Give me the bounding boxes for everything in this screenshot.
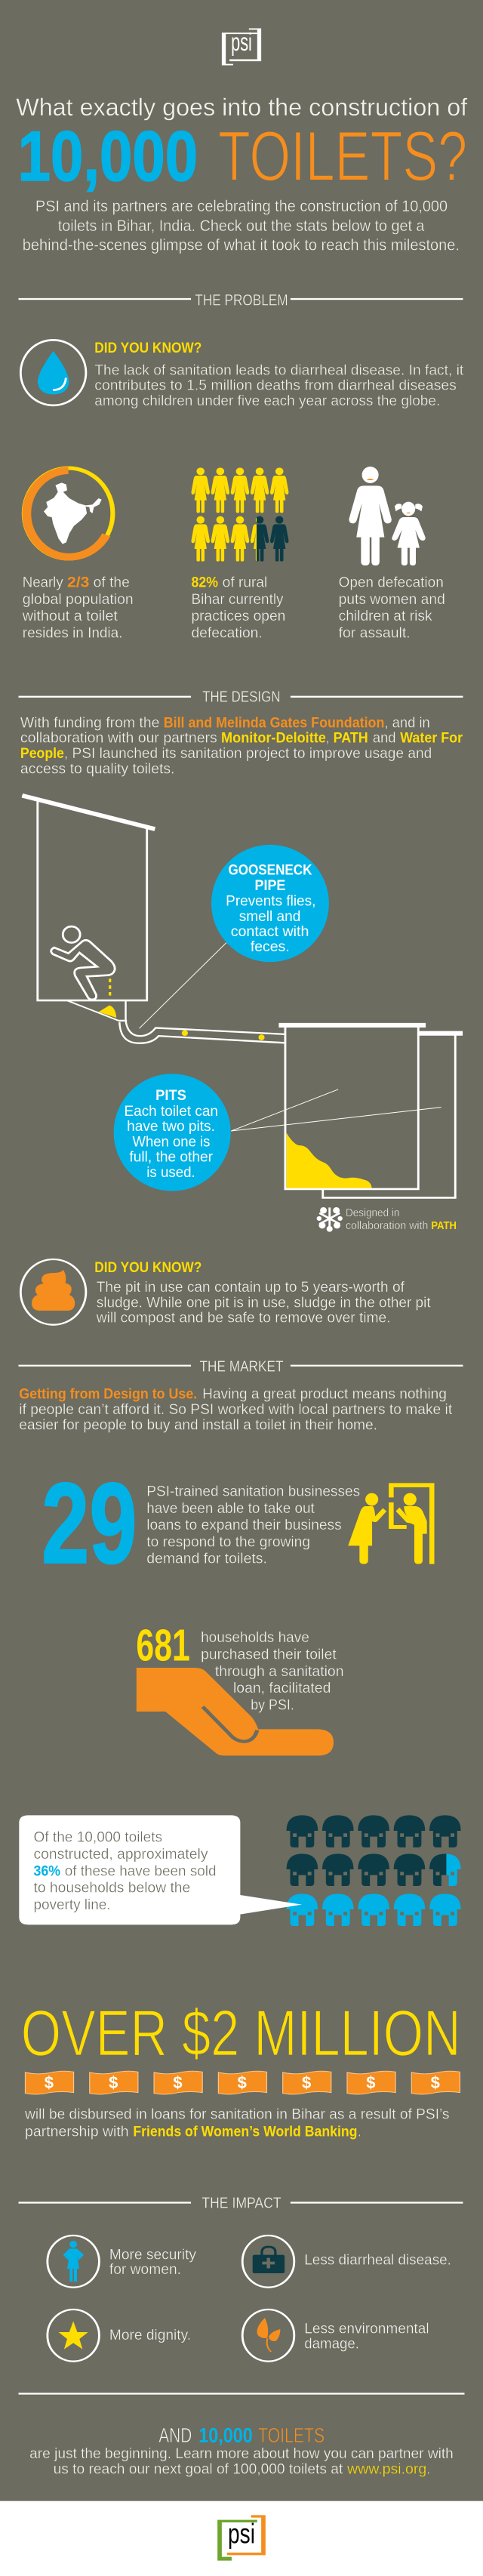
designed with PATH text: PATH (431, 1220, 457, 1232)
callout: gooseneck pipe: Prevents flies, (226, 893, 315, 909)
stat text: 82% (191, 575, 285, 641)
design paragraph: , (326, 731, 329, 746)
heading: the problem: THE PROBLEM (195, 291, 288, 309)
households text: loan, facilitated (233, 1681, 331, 1696)
businesses text: PSI-trained sanitation businesses (146, 1484, 360, 1499)
chart: donut with india map (24, 468, 112, 559)
stat text: 2/3: of the (94, 575, 130, 590)
pictogram: people 82% (191, 467, 288, 562)
callout: pits: Each toilet can (124, 1103, 218, 1120)
icon: sludge pile (20, 1259, 86, 1325)
callout: pits: PITS (155, 1088, 186, 1104)
callout: gooseneck pipe: contact with (231, 924, 309, 940)
closing text: us to reach our next goal of 100,000 toilets at (54, 2461, 343, 2477)
design paragraph: With funding from the (20, 715, 159, 731)
impact text: dignity: More dignity. (109, 2328, 191, 2343)
callout: gooseneck pipe: PIPE (255, 877, 285, 894)
logo: psi colour (217, 2515, 266, 2561)
stat text: 82%: Bihar currently (191, 592, 284, 607)
closing text (29, 2446, 454, 2477)
stat text: 2/3: resides in India. (23, 626, 122, 641)
stat text: open defecation: for assault. (339, 626, 411, 641)
did you know text 1: contributes to 1.5 million deaths from diarrheal diseases (94, 377, 457, 393)
designed with PATH text (346, 1206, 457, 1232)
closing heading: AND (158, 2424, 192, 2447)
closing text: . (427, 2461, 430, 2477)
loans section (19, 1621, 461, 1926)
households text: purchased their toilet (201, 1647, 337, 1662)
title: 10,000 (18, 116, 198, 196)
icon: hand (137, 1668, 334, 1755)
design paragraph: collaboration with our partners (20, 731, 217, 746)
design paragraph: People (20, 746, 64, 761)
design paragraph: , and in (384, 715, 430, 731)
callout: gooseneck pipe (211, 845, 329, 962)
callout: 36%: of these have been sold (65, 1863, 217, 1879)
intro text (23, 197, 460, 254)
loan text (24, 2107, 450, 2140)
intro text: toilets in Bihar, India. Check out the stats below to get a (58, 217, 425, 235)
closing heading: TOILETS (258, 2424, 325, 2447)
businesses text: loans to expand their business (146, 1518, 342, 1533)
callout: 36%: 36% (33, 1863, 60, 1879)
icon: medical kit (242, 2236, 294, 2288)
loan text: Friends of Women’s World Banking (133, 2124, 357, 2140)
diagram: two pits (278, 1025, 463, 1197)
stat text: 82%: of rural (223, 575, 267, 590)
big number 29: 29 (42, 1459, 137, 1588)
callout: pits: have two pits. (127, 1119, 215, 1135)
big number 681: 681 (136, 1621, 190, 1671)
design paragraph: Water For (400, 731, 463, 746)
impact text: security (109, 2247, 196, 2277)
stat text: 82%: 82% (191, 575, 218, 590)
icons: banknotes (25, 2071, 460, 2094)
divider (18, 2393, 465, 2395)
did you know text 1: DID YOU KNOW? (94, 340, 202, 356)
funding and impact section (18, 1998, 463, 2288)
callout: 36%: poverty line. (33, 1897, 111, 1912)
icon: woman and child (349, 467, 426, 565)
icon: PATH snowflake (317, 1207, 343, 1232)
callout: gooseneck pipe: feces. (251, 939, 290, 955)
stat text: 2/3 (22, 575, 134, 641)
impact text: environment: damage. (304, 2337, 359, 2352)
logo: psi white: psi (231, 29, 252, 57)
did you know text 2: will compost and be safe to remove over time. (96, 1311, 391, 1326)
icon: water drop (20, 340, 86, 405)
diagram: toilet house with squatting figure (22, 796, 155, 1021)
design paragraph: and (373, 731, 395, 746)
impact text: security: for women. (109, 2262, 181, 2277)
logo: psi colour: psi (228, 2517, 255, 2549)
stat text: 2/3: global population (23, 592, 134, 607)
design paragraph (20, 715, 463, 777)
design paragraph: Bill and Melinda Gates Foundation (164, 715, 384, 731)
icon: leaves (242, 2309, 294, 2362)
callout: 36% (19, 1815, 302, 1924)
did you know text 1 (94, 340, 464, 409)
callout: pits (114, 1074, 231, 1191)
households text (201, 1630, 344, 1713)
stat text: 2/3: 2/3 (67, 575, 90, 590)
closing text: www.psi.org (346, 2461, 426, 2477)
callout: pits: full, the other (129, 1149, 213, 1165)
did you know text 2: The pit in use can contain up to 5 years-worth of (97, 1280, 405, 1295)
businesses text: have been able to take out (146, 1501, 315, 1516)
icon: two people at door (348, 1483, 435, 1564)
did you know text 2 (94, 1260, 431, 1326)
impact text: security: More security (109, 2247, 196, 2263)
callout: 36%: to households below the (33, 1881, 190, 1896)
title: What exactly goes into the construction of (16, 94, 468, 122)
loan text: partnership with (25, 2124, 129, 2140)
loan text: . (358, 2124, 361, 2140)
designed with PATH text: Designed in (346, 1206, 399, 1219)
stat text: open defecation: children at risk (339, 609, 432, 624)
heading: the market: THE MARKET (199, 1357, 284, 1375)
did you know text 2: DID YOU KNOW? (94, 1260, 202, 1275)
stats and design intro section (18, 467, 463, 777)
closing heading: 10,000 (198, 2424, 253, 2447)
did you know 2 and market section (18, 1259, 463, 1588)
businesses text: demand for toilets. (146, 1551, 267, 1567)
heading: the impact: THE IMPACT (202, 2194, 281, 2211)
callout: pits: is used. (146, 1164, 195, 1181)
businesses text (146, 1484, 360, 1567)
callout: 36%: constructed, approximately (33, 1847, 208, 1862)
callout: gooseneck pipe: GOOSENECK (228, 862, 312, 878)
diagram: gooseneck pipe (118, 1001, 285, 1043)
designed with PATH text: collaboration with (346, 1220, 428, 1232)
stat text: 2/3: Nearly (23, 575, 63, 590)
callout leader lines (139, 943, 441, 1131)
footer band (0, 2501, 483, 2576)
callout: pits: When one is (133, 1134, 210, 1150)
icon: woman security (48, 2236, 99, 2288)
market paragraph (19, 1387, 452, 1433)
design paragraph: Monitor-Deloitte (221, 731, 326, 746)
stat text: 82%: practices open (191, 609, 285, 624)
icon: star (48, 2309, 99, 2362)
impact text: environment (304, 2322, 429, 2352)
closing section (0, 2309, 483, 2576)
stat text: open defecation (339, 575, 445, 641)
callout: gooseneck pipe: smell and (239, 908, 300, 925)
households text: through a sanitation (215, 1664, 344, 1679)
callout: 36%: Of the 10,000 toilets (33, 1829, 162, 1845)
stat text: open defecation: Open defecation (339, 575, 444, 590)
pictogram: houses 36% (287, 1815, 461, 1926)
design paragraph: PATH (334, 731, 368, 746)
businesses text: to respond to the growing (146, 1535, 310, 1550)
stat text: 82%: defecation. (191, 626, 263, 641)
design paragraph: access to quality toilets. (20, 761, 174, 777)
header section (16, 28, 468, 409)
did you know text 1: among children under five each year across the globe. (94, 393, 440, 409)
market paragraph: Getting from Design to Use. (19, 1387, 197, 1402)
households text: households have (201, 1630, 309, 1645)
stat text: open defecation: puts women and (339, 592, 445, 607)
title (16, 94, 468, 196)
households text: by PSI. (251, 1697, 294, 1713)
impact text: environment: Less environmental (304, 2322, 429, 2337)
market paragraph: easier for people to buy and install a toilet in their home. (19, 1417, 377, 1433)
stat text: 2/3: without a toilet (22, 609, 118, 624)
did you know text 1: The lack of sanitation leads to diarrheal disease. In fact, it (94, 362, 464, 378)
toilet diagram section (22, 796, 463, 1232)
logo: psi white (222, 28, 261, 65)
closing heading (158, 2424, 325, 2447)
heading: the design: THE DESIGN (202, 688, 280, 705)
impact text: disease: Less diarrheal disease. (304, 2252, 451, 2268)
